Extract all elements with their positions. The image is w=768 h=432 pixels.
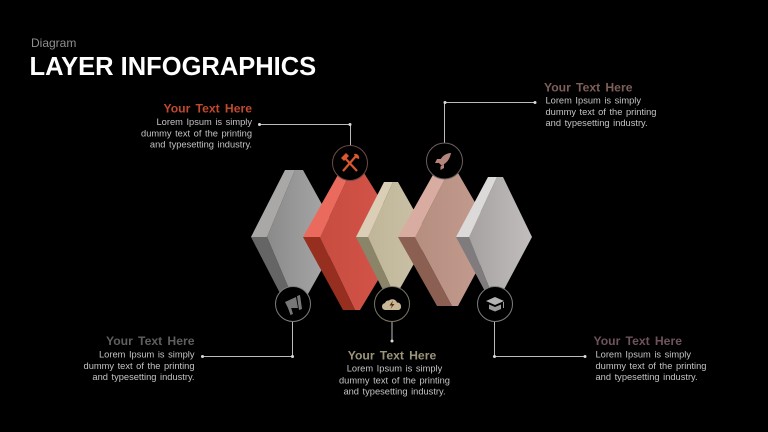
subtitle: Diagram: Diagram — [31, 36, 76, 50]
text block: bottom left: dummy text of the printing — [84, 361, 194, 371]
icon: rocket — [426, 143, 462, 179]
layer 1: gray — [251, 170, 340, 303]
text block: top left — [141, 102, 252, 150]
text block: bottom right: Lorem Ipsum is simply — [596, 350, 691, 360]
icon: hammer and wrench — [332, 146, 368, 180]
text block: top right: dummy text of the printing — [546, 107, 656, 117]
title: LAYER INFOGRAPHICS — [30, 53, 316, 81]
text block: bottom right: Your Text Here — [594, 334, 682, 348]
text block: bottom left: and typesetting industry. — [92, 372, 194, 382]
text block: bottom right: and typesetting industry. — [596, 372, 698, 382]
connector: top right — [444, 101, 536, 143]
text block: top right: Lorem Ipsum is simply — [546, 96, 641, 106]
icon: cloud with bolt — [374, 286, 410, 322]
diagram: layered chevrons — [251, 170, 532, 310]
text block: top left: Lorem Ipsum is simply — [157, 117, 252, 127]
text block: top right: and typesetting industry. — [546, 118, 648, 128]
layer 4: pink — [398, 173, 495, 306]
text block: bottom middle: and typesetting industry. — [343, 386, 446, 396]
text block: bottom middle: dummy text of the printing — [339, 376, 450, 386]
text block: top left: Your Text Here — [164, 102, 252, 116]
icon: megaphone — [276, 286, 310, 322]
icon: graduation cap — [478, 286, 512, 322]
layer 3: beige — [356, 182, 429, 292]
connector: bottom middle — [390, 321, 394, 342]
text block: bottom right: dummy text of the printing — [596, 361, 706, 371]
text block: bottom left: Your Text Here — [106, 334, 195, 348]
text block: bottom middle — [339, 348, 450, 396]
text block: bottom left — [84, 334, 195, 382]
layer 2: red — [303, 173, 404, 310]
connector: bottom left — [201, 321, 294, 358]
text block: bottom middle: Lorem Ipsum is simply — [347, 364, 443, 374]
connector: top left — [258, 123, 352, 146]
text block: bottom left: Lorem Ipsum is simply — [99, 350, 195, 360]
text block: top right — [544, 80, 656, 128]
text block: top right: Your Text Here — [544, 80, 633, 94]
connector: bottom right — [493, 321, 586, 358]
text block: top left: dummy text of the printing — [141, 128, 252, 138]
text block: top left: and typesetting industry. — [150, 140, 252, 150]
layer 5: white — [456, 177, 532, 297]
text block: bottom right — [594, 334, 706, 382]
text block: bottom middle: Your Text Here — [348, 348, 436, 362]
